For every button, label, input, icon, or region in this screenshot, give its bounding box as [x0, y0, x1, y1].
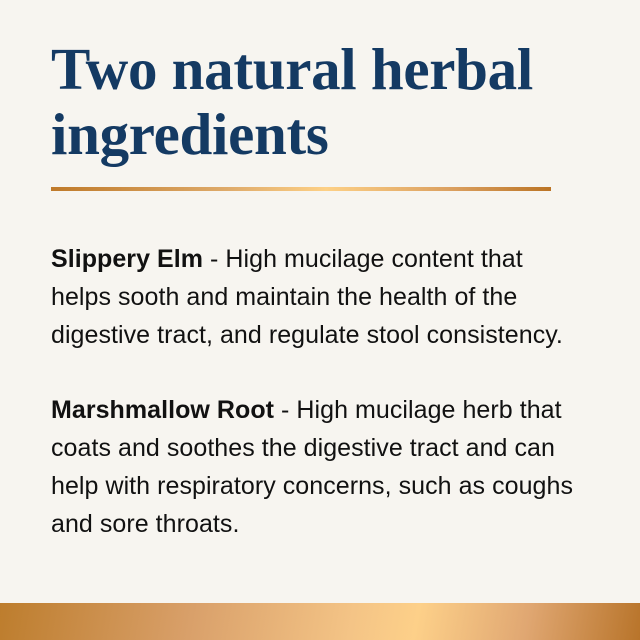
text block: marshmallow root: coats and soothes the digestive tract and can [51, 434, 555, 462]
divider line [51, 187, 551, 191]
text block: slippery elm: digestive tract, and regulate stool consistency. [51, 321, 563, 349]
bottom gradient bar [0, 603, 640, 640]
text block: slippery elm: Slippery Elm - High mucilage content that [51, 245, 523, 273]
text block: slippery elm [51, 245, 563, 349]
text block: marshmallow root: and sore throats. [51, 510, 239, 538]
text block: marshmallow root [51, 396, 573, 538]
text block: marshmallow root: help with respiratory concerns, such as coughs [51, 472, 573, 500]
title [51, 36, 533, 167]
title: Two natural herbal [51, 36, 533, 102]
text block: slippery elm: helps sooth and maintain the health of the [51, 283, 517, 311]
text block: marshmallow root: Marshmallow Root - High mucilage herb that [51, 396, 562, 424]
title: ingredients [51, 101, 329, 167]
